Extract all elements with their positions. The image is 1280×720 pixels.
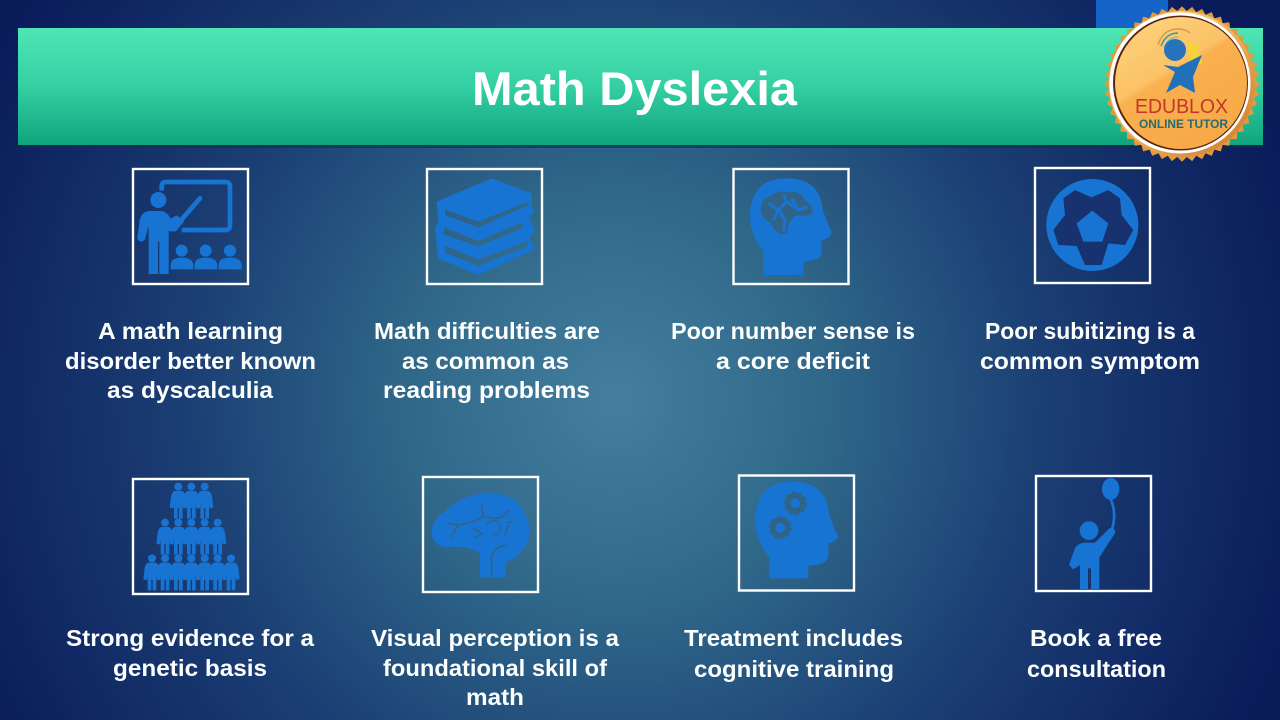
text: cognitive training (684, 625, 903, 682)
text: cognitive training: cognitive training (694, 656, 894, 682)
text: consultation: Book a free (1030, 625, 1162, 651)
panel: genetic basis (66, 479, 314, 681)
text: genetic basis: Strong evidence for a (66, 625, 314, 651)
text: common difficulties: reading problems (383, 377, 590, 403)
icon: head with gears (739, 476, 854, 590)
text: common difficulties (374, 318, 600, 403)
panel: subitizing (980, 168, 1200, 374)
title: Math Dyslexia (472, 62, 798, 115)
panel: consultation (1027, 476, 1166, 682)
logo figure (1158, 29, 1203, 93)
blue tab behind badge (1096, 0, 1168, 29)
badge: Edublox Online Tutor (1104, 6, 1260, 162)
text: subitizing: Poor subitizing is a (985, 318, 1195, 344)
text: dyscalculia (65, 318, 316, 403)
panel: visual perception (371, 477, 619, 710)
text: cognitive training: Treatment includes (684, 625, 903, 651)
icon: brain side view (423, 477, 538, 592)
panel: dyscalculia (65, 169, 316, 403)
icon: head with brain (734, 169, 848, 284)
icon: soccer ball (1035, 168, 1150, 283)
text: genetic basis (66, 625, 314, 681)
text: number sense: Poor number sense is (671, 318, 915, 344)
icon: stack of books (427, 169, 542, 284)
icon: pyramid of people (133, 479, 248, 594)
panel: cognitive training (684, 476, 903, 682)
text: consultation: consultation (1027, 656, 1166, 682)
title banner (18, 28, 1263, 148)
text: dyscalculia: as dyscalculia (107, 377, 273, 403)
text: genetic basis: genetic basis (113, 655, 267, 681)
icon: teacher at board (133, 169, 248, 284)
panel: common difficulties (374, 169, 600, 403)
text: common difficulties: Math difficulties are (374, 318, 600, 344)
text: subitizing: common symptom (980, 348, 1200, 374)
text: common difficulties: as common as (402, 348, 569, 374)
text: dyscalculia: disorder better known (65, 348, 316, 374)
icon: person holding balloon (1036, 476, 1151, 591)
text: number sense (671, 318, 915, 374)
text: subitizing (980, 318, 1200, 374)
panel: number sense (671, 169, 915, 374)
text: visual perception: math (466, 684, 524, 710)
logo wordmark: EDUBLOX (1135, 96, 1228, 118)
text: visual perception: Visual perception is a (371, 625, 619, 651)
text: number sense: a core deficit (716, 348, 870, 374)
text: visual perception: foundational skill of (383, 655, 607, 681)
logo tagline: ONLINE TUTOR (1139, 119, 1229, 131)
text: visual perception (371, 625, 619, 710)
text: dyscalculia: A math learning (98, 318, 283, 344)
text: consultation (1027, 625, 1166, 682)
